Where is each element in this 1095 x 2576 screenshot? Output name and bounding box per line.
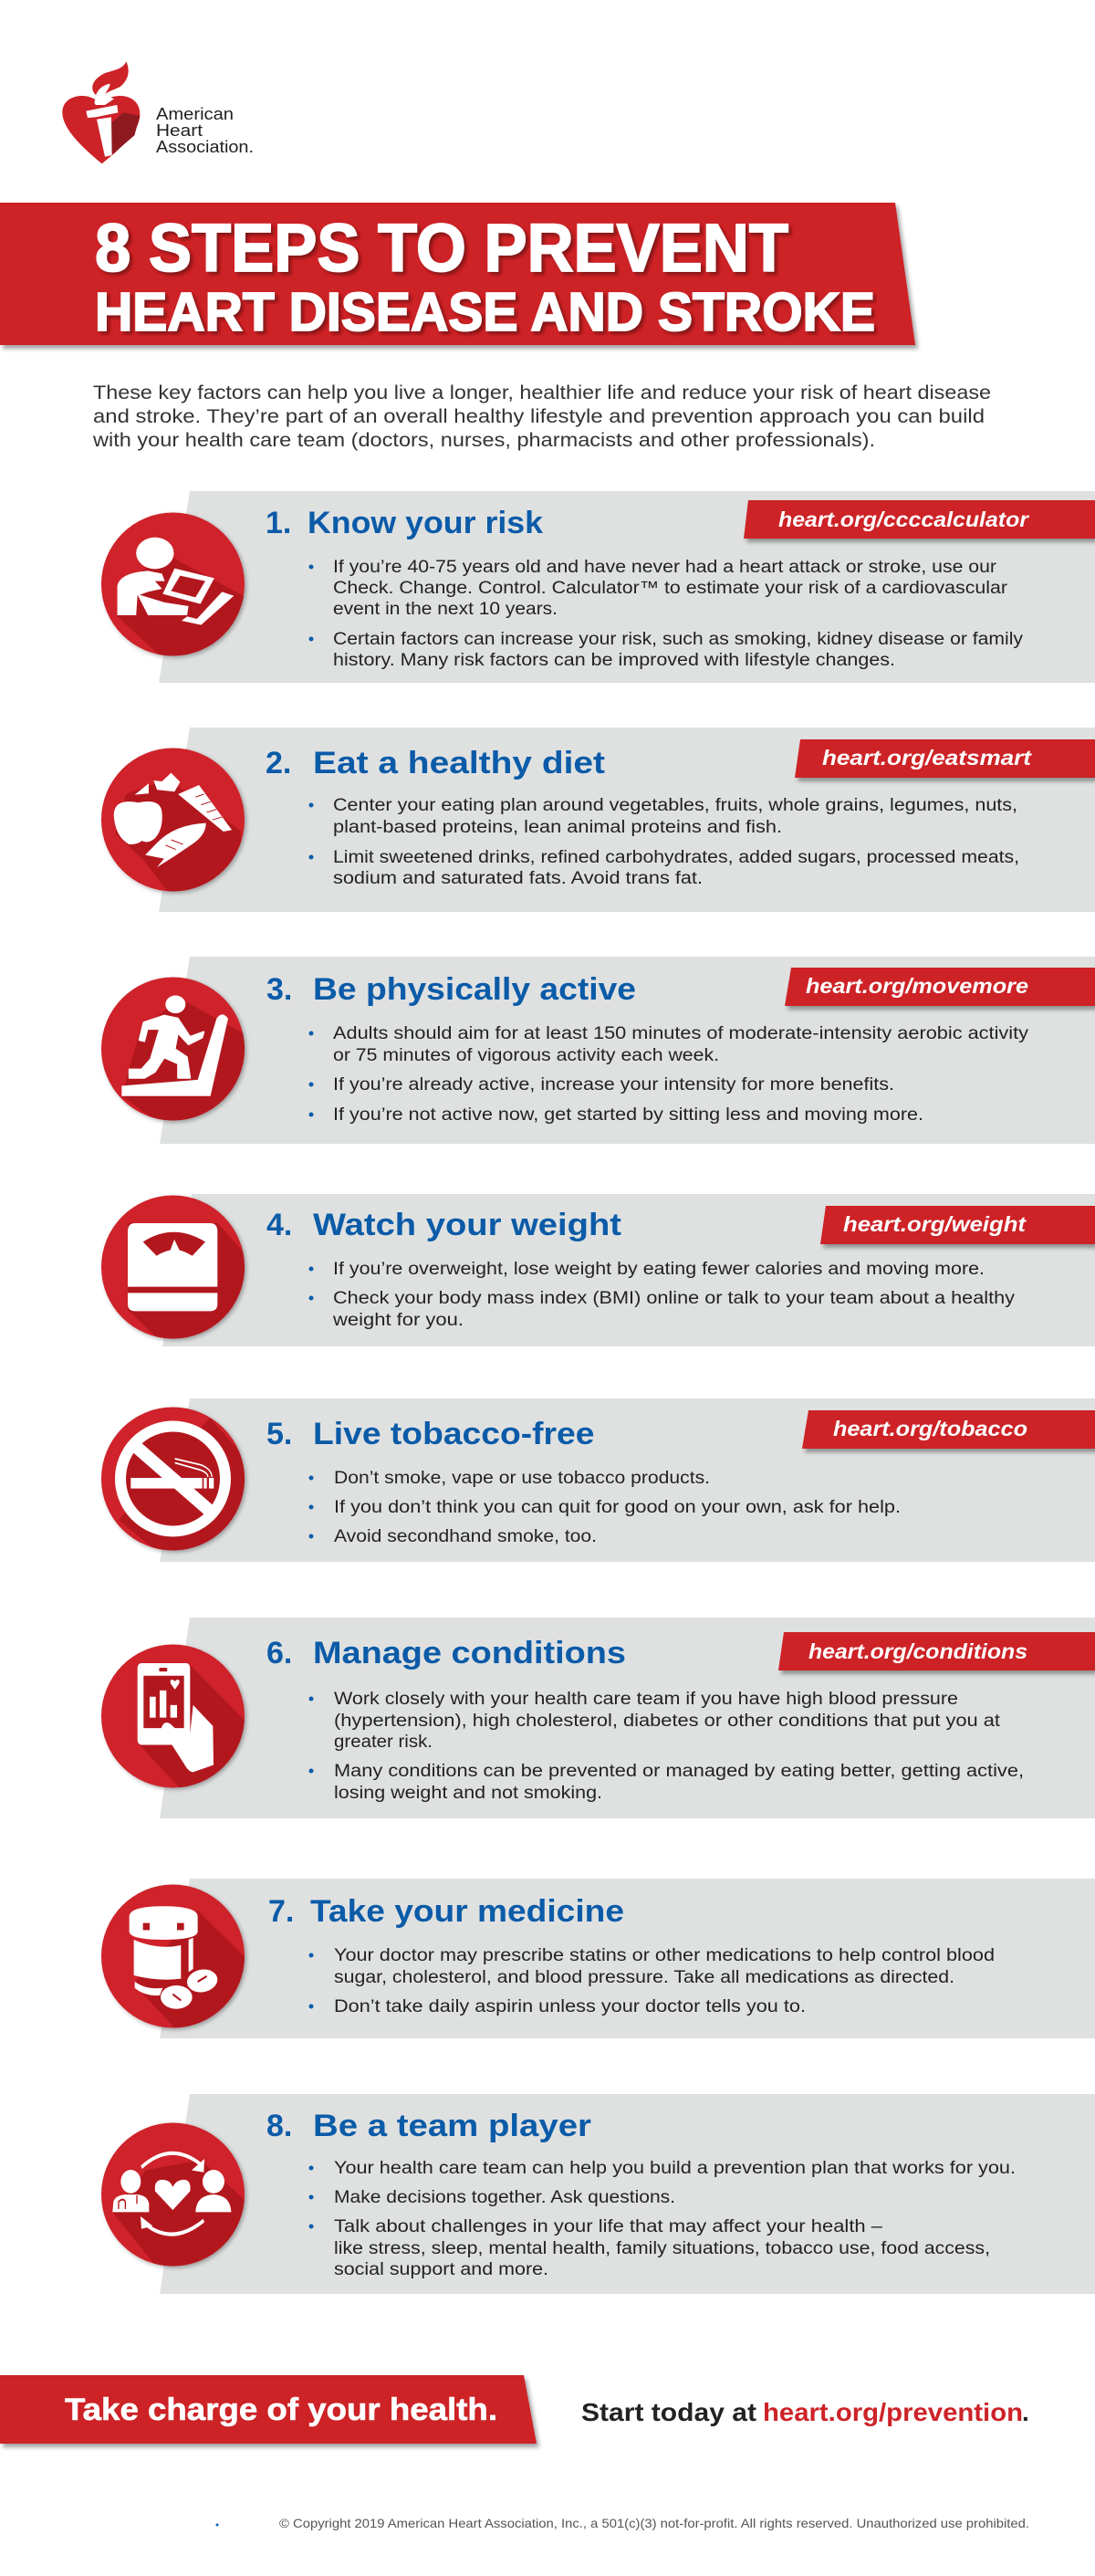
step 4 heading: 4.: [266, 1208, 292, 1242]
title: [95, 210, 875, 342]
step 1 heading: Know your risk: [308, 506, 543, 540]
step 5 bullets: Avoid secondhand smoke, too.: [334, 1527, 597, 1546]
step 4 link tag: [820, 1206, 1095, 1244]
step 1 link tag: heart.org/ccccalculator: [778, 508, 1029, 531]
step 3 bullets: or 75 minutes of vigorous activity each week.: [333, 1046, 719, 1065]
copyright: © Copyright 2019 American Heart Association, Inc., a 501(c)(3) not-for-profit. All rights reserved. Unauthorized use prohibited.: [279, 2516, 1029, 2530]
icon: doctor and patient with heart: [101, 2123, 246, 2273]
step 5 bullets: Don’t smoke, vape or use tobacco products.: [334, 1469, 710, 1488]
step 1 heading: 1.: [266, 506, 291, 540]
step 3 link tag: heart.org/movemore: [806, 974, 1028, 998]
step 8 bullets: Make decisions together. Ask questions.: [334, 2188, 675, 2207]
step 6 heading: Manage conditions: [313, 1636, 626, 1670]
step 5 heading: Live tobacco-free: [313, 1417, 595, 1451]
title: HEART DISEASE AND STROKE: [95, 282, 875, 342]
intro text: [92, 382, 991, 451]
step 3 heading: Be physically active: [313, 972, 636, 1007]
logo: American Heart Association: [62, 61, 254, 163]
step 7 bullets: Your doctor may prescribe statins or other medications to help control blood: [334, 1946, 995, 1965]
step 3 bullets: [308, 1024, 1029, 1125]
step 3 bullets: If you’re already active, increase your intensity for more benefits.: [333, 1075, 894, 1094]
step 6 bullets: Work closely with your health care team if you have high blood pressure: [334, 1690, 958, 1709]
step 3 bullets: Adults should aim for at least 150 minutes of moderate-intensity aerobic activity: [333, 1024, 1029, 1043]
step 1 bullets: event in the next 10 years.: [333, 600, 558, 619]
title banner: [0, 203, 915, 345]
panel: step 3 be physically active: [101, 957, 1095, 1144]
step 8 bullets: Talk about challenges in your life that may affect your health –: [334, 2217, 882, 2236]
step 1 bullets: history. Many risk factors can be improved with lifestyle changes.: [333, 651, 895, 670]
footer banner: take charge of your health: [0, 2375, 537, 2444]
step 1 link tag: [744, 500, 1095, 539]
step 6 bullets: [308, 1690, 1024, 1803]
step 8 heading: Be a team player: [313, 2109, 591, 2143]
panel: step 4 watch your weight: [101, 1194, 1095, 1346]
step 4 heading: Watch your weight: [313, 1208, 621, 1242]
panel: step 8 be a team player: [101, 2094, 1095, 2294]
logo wordmark: Association.: [156, 138, 254, 156]
step 4 bullets: Check your body mass index (BMI) online or talk to your team about a healthy: [333, 1289, 1016, 1308]
panel: step 6 manage conditions: [101, 1618, 1095, 1818]
step 6 bullets: greater risk.: [334, 1733, 433, 1752]
step 6 heading: 6.: [266, 1636, 292, 1670]
icon: pill bottle and pills: [101, 1884, 246, 2030]
step 8 bullets: Your health care team can help you build a prevention plan that works for you.: [334, 2159, 1016, 2178]
step 8 heading: 8.: [266, 2109, 292, 2143]
icon: no smoking sign: [101, 1408, 246, 1553]
step 7 bullets: sugar, cholesterol, and blood pressure. Take all medications as directed.: [334, 1968, 954, 1987]
step 5 link tag: [802, 1410, 1095, 1449]
step 5 heading: 5.: [266, 1417, 292, 1451]
step 6 link tag: [778, 1632, 1095, 1670]
step 4 link tag: heart.org/weight: [843, 1212, 1027, 1236]
step 2 link tag: [795, 739, 1095, 778]
intro text: These key factors can help you live a longer, healthier life and reduce your risk of heart disease: [93, 382, 991, 403]
logo mark: heart and torch: [62, 61, 140, 163]
step 2 link tag: heart.org/eatsmart: [822, 746, 1033, 770]
icon: runner on treadmill: [101, 977, 246, 1125]
step 2 heading: 2.: [266, 746, 291, 780]
logo wordmark: [156, 105, 254, 156]
icon: bathroom scale: [101, 1196, 246, 1341]
step 4 bullets: [308, 1260, 1016, 1330]
step 8 bullets: [308, 2159, 1016, 2279]
call to action: start today: heart.org/prevention: [763, 2398, 1023, 2426]
panel: step 2 eat a healthy diet: [101, 728, 1095, 912]
footer banner: take charge of your health: Take charge of your health.: [65, 2393, 497, 2427]
step 2 bullets: sodium and saturated fats. Avoid trans fat.: [333, 869, 703, 888]
step 3 bullets: If you’re not active now, get started by sitting less and moving more.: [333, 1105, 923, 1125]
call to action: start today: Start today at: [581, 2398, 756, 2426]
step 1 bullets: If you’re 40-75 years old and have never had a heart attack or stroke, use our: [333, 558, 997, 577]
call to action: start today: [581, 2398, 1029, 2426]
step 4 bullets: If you’re overweight, lose weight by eating fewer calories and moving more.: [333, 1260, 985, 1279]
step 2 bullets: Center your eating plan around vegetables, fruits, whole grains, legumes, nuts,: [333, 796, 1017, 815]
intro text: and stroke. They’re part of an overall healthy lifestyle and prevention approach you can build: [93, 406, 985, 427]
step 7 heading: 7.: [268, 1894, 294, 1929]
step 1 bullets: Certain factors can increase your risk, such as smoking, kidney disease or family: [333, 630, 1024, 649]
step 2 heading: Eat a healthy diet: [313, 746, 605, 780]
step 7 heading: Take your medicine: [310, 1894, 624, 1929]
step 6 link tag: heart.org/conditions: [808, 1639, 1027, 1663]
step 2 bullets: plant-based proteins, lean animal proteins and fish.: [333, 818, 782, 837]
step 1 bullets: [308, 558, 1024, 670]
step 8 bullets: like stress, sleep, mental health, family situations, tobacco use, food access,: [334, 2239, 990, 2258]
step 2 bullets: Limit sweetened drinks, refined carbohydrates, added sugars, processed meats,: [333, 848, 1019, 867]
panel: step 5 live tobacco-free: [101, 1398, 1095, 1562]
step 5 bullets: [308, 1469, 901, 1546]
step 6 bullets: (hypertension), high cholesterol, diabetes or other conditions that put you at: [334, 1712, 1001, 1731]
step 7 bullets: Don’t take daily aspirin unless your doctor tells you to.: [334, 1997, 806, 2016]
panel: step 7 take your medicine: [101, 1879, 1095, 2038]
logo wordmark: American: [156, 105, 234, 123]
step 5 link tag: heart.org/tobacco: [833, 1417, 1027, 1440]
intro text: with your health care team (doctors, nurses, pharmacists and other professionals).: [92, 430, 875, 451]
step 8 bullets: social support and more.: [334, 2260, 548, 2279]
step 5 bullets: If you don’t think you can quit for good on your own, ask for help.: [334, 1498, 901, 1517]
step 7 bullets: [308, 1946, 995, 2016]
icon: apple, carrot and fish: [101, 749, 245, 896]
step 3 heading: 3.: [266, 972, 292, 1007]
step 6 bullets: Many conditions can be prevented or managed by eating better, getting active,: [334, 1762, 1024, 1781]
step 6 bullets: losing weight and not smoking.: [334, 1784, 602, 1803]
logo wordmark: Heart: [156, 121, 203, 140]
step 2 bullets: [308, 796, 1019, 888]
icon: person with laptop: [101, 513, 245, 664]
title: 8 STEPS TO PREVENT: [95, 210, 788, 286]
step 3 link tag: [785, 968, 1095, 1006]
step 1 bullets: Check. Change. Control. Calculator™ to estimate your risk of a cardiovascular: [333, 579, 1008, 598]
icon: hand holding phone: [101, 1645, 246, 1791]
panel: step 1 know your risk: [101, 491, 1095, 683]
step 4 bullets: weight for you.: [332, 1311, 464, 1330]
call to action: start today: .: [1022, 2398, 1029, 2426]
